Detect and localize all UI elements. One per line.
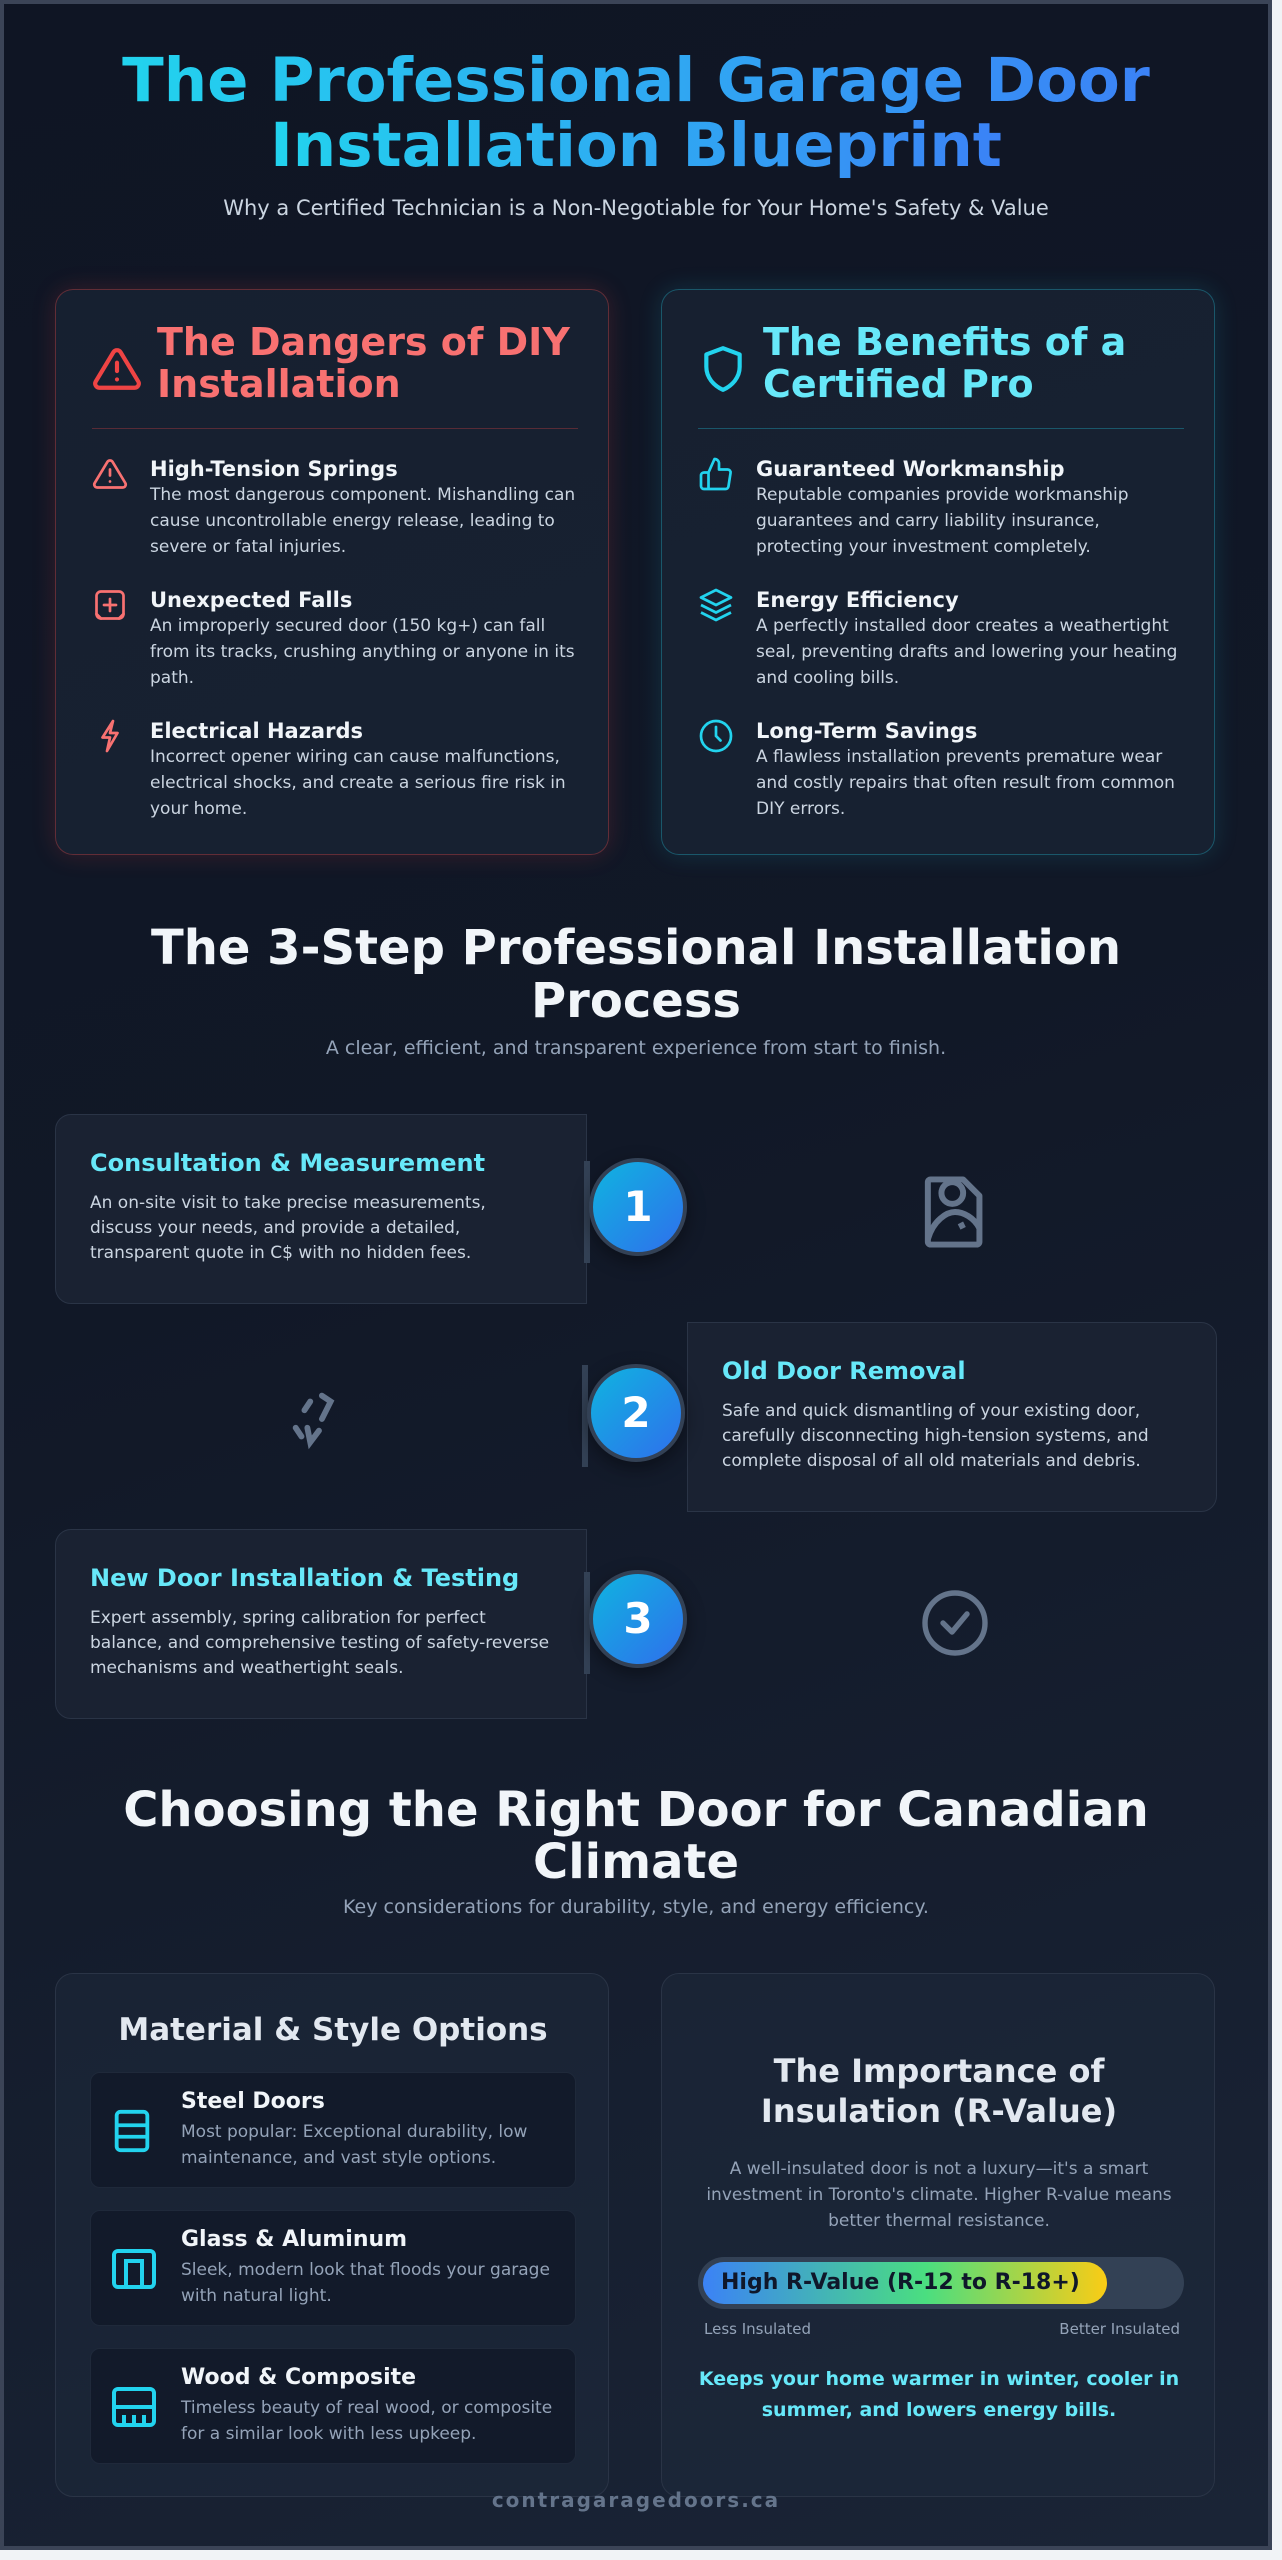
panel: dangers (55, 289, 609, 855)
heading: process: Process (531, 973, 741, 1029)
item: electrical (101, 719, 566, 819)
item: savings: Long-Term Savings (756, 719, 977, 743)
panel: benefits (661, 289, 1215, 855)
panel: insulation (661, 1973, 1215, 2497)
item: springs: The most dangerous component. Mishandling can cause uncontrollable energy release, leading to severe or fatal injuries. (150, 485, 575, 557)
item: falls: An improperly secured door (150 kg+) can fall from its tracks, crushing anything or anyone in its path. (150, 616, 575, 688)
item: steel (90, 2072, 576, 2188)
item: energy: A perfectly installed door creates a weathertight seal, preventing drafts and lowering your heating and cooling bills. (756, 616, 1177, 688)
step 1 number: 1 (623, 1182, 653, 1231)
item: energy: Energy Efficiency (756, 588, 959, 612)
labels: bar scale: Better Insulated (1059, 2320, 1180, 2338)
item: workmanship: Guaranteed Workmanship (756, 457, 1065, 481)
item: springs: High-Tension Springs (150, 457, 398, 481)
heading: dangers (157, 320, 570, 406)
title (122, 45, 1150, 181)
step 2 card: Old Door Removal (722, 1357, 966, 1385)
heading: benefits: Certified Pro (763, 362, 1034, 406)
item: falls: Unexpected Falls (150, 588, 352, 612)
subtitle: process: A clear, efficient, and transparent experience from start to finish. (326, 1037, 946, 1059)
icon: tools (292, 1392, 334, 1450)
step 3 card: Expert assembly, spring calibration for perfect balance, and comprehensive testing of safety-reverse mechanisms and weathertight seals. (90, 1608, 549, 1678)
subtitle: Why a Certified Technician is a Non-Negotiable for Your Home's Safety & Value (223, 196, 1049, 220)
item: glass (90, 2210, 576, 2326)
chart: r-value bar: High R-Value (R-12 to R-18+) (721, 2270, 1080, 2295)
item: electrical: Incorrect opener wiring can cause malfunctions, electrical shocks, and create a serious fire risk in your home. (150, 747, 566, 819)
step 2 number: 2 (621, 1388, 651, 1437)
footer: contragaragedoors.ca (492, 2488, 780, 2512)
title: The Professional Garage Door (122, 45, 1150, 116)
chart: r-value bar (698, 2257, 1184, 2309)
icon: document (924, 1176, 982, 1248)
heading: choosing: Climate (533, 1834, 739, 1890)
heading: choosing: Choosing the Right Door for Canadian (123, 1782, 1149, 1838)
labels: bar scale (704, 2320, 1180, 2338)
heading: choosing (123, 1782, 1149, 1890)
item: glass: Glass & Aluminum (181, 2227, 407, 2252)
step 1 card: An on-site visit to take precise measurements, discuss your needs, and provide a detailed, transparent quote in C$ with no hidden fees. (90, 1193, 486, 1263)
labels: bar scale: Less Insulated (704, 2320, 811, 2338)
step 3 number: 3 (623, 1594, 653, 1643)
icon: shield (704, 346, 742, 392)
heading: process: The 3-Step Professional Installation (151, 920, 1121, 976)
heading: benefits (763, 320, 1126, 406)
callout: benefit: Keeps your home warmer in winter, cooler in summer, and lowers energy bills. (699, 2368, 1179, 2421)
item: workmanship: Reputable companies provide workmanship guarantees and carry liability insurance, protecting your investment completely. (756, 485, 1129, 557)
heading: dangers: Installation (157, 362, 401, 406)
icon: warning (93, 348, 141, 390)
item: energy (700, 588, 1177, 688)
item: steel: Steel Doors (181, 2089, 325, 2114)
icon: check (922, 1590, 988, 1656)
heading: process (151, 920, 1121, 1029)
step 2 number (587, 1364, 685, 1462)
item: savings: A flawless installation prevents premature wear and costly repairs that often result from common DIY errors. (756, 747, 1175, 819)
subtitle: choosing: Key considerations for durability, style, and energy efficiency. (343, 1896, 929, 1918)
item: falls (95, 588, 575, 688)
heading: benefits: The Benefits of a (763, 320, 1126, 364)
item: electrical: Electrical Hazards (150, 719, 363, 743)
item: workmanship (700, 457, 1129, 557)
item: wood: Wood & Composite (181, 2365, 416, 2390)
heading: materials: Material & Style Options (118, 2012, 548, 2048)
item: springs (92, 457, 575, 557)
heading: insulation (761, 2052, 1117, 2130)
step 1 card: Consultation & Measurement (90, 1149, 485, 1177)
step 2 card (687, 1322, 1217, 1512)
step 3 card (55, 1529, 587, 1719)
title: Installation Blueprint (270, 110, 1002, 181)
step 2 card: Safe and quick dismantling of your existing door, carefully disconnecting high-tension systems, and complete disposal of all old materials and debris. (722, 1401, 1149, 1471)
item: wood: Timeless beauty of real wood, or composite for a similar look with less upkeep. (181, 2398, 552, 2444)
step 1 number (589, 1158, 687, 1256)
item: glass: Sleek, modern look that floods your garage with natural light. (181, 2260, 550, 2306)
heading: insulation: The Importance of (774, 2052, 1104, 2090)
step 1 card (55, 1114, 587, 1304)
heading: insulation: Insulation (R-Value) (761, 2092, 1117, 2130)
item: wood (90, 2348, 576, 2464)
text: insulation: A well-insulated door is not a luxury—it's a smart investment in Toronto's climate. Higher R-value means better thermal resistance. (706, 2159, 1172, 2231)
item: steel: Most popular: Exceptional durability, low maintenance, and vast style options. (181, 2122, 527, 2168)
heading: dangers: The Dangers of DIY (157, 320, 570, 364)
step 3 number (589, 1570, 687, 1668)
item: savings (700, 719, 1175, 819)
panel: materials (55, 1973, 609, 2497)
step 3 card: New Door Installation & Testing (90, 1564, 519, 1592)
